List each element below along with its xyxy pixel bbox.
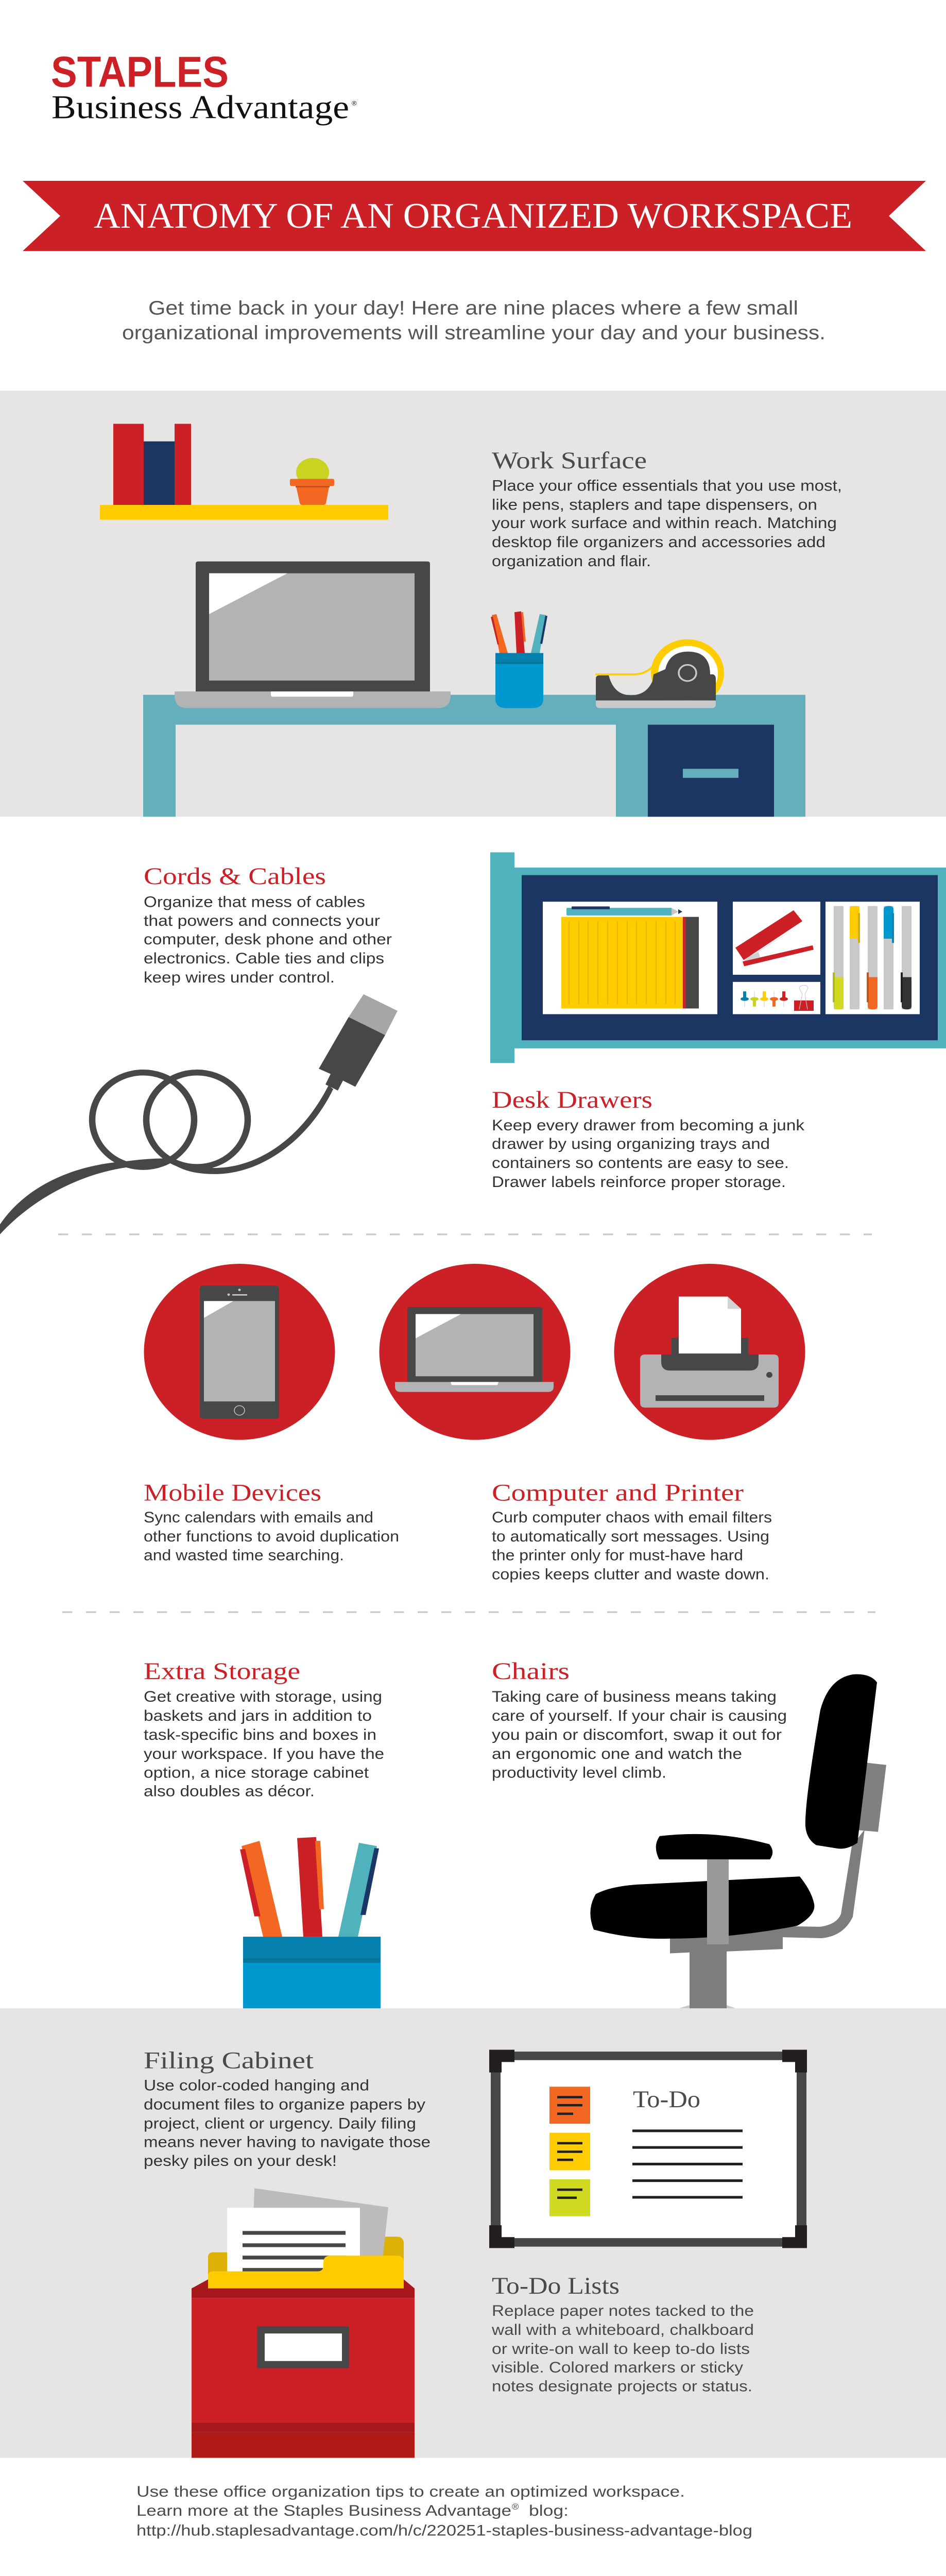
panel: chairs bbox=[492, 1658, 886, 2008]
logo: Staples Business Advantage: ® bbox=[352, 100, 357, 107]
text: filing body: pesky piles on your desk! bbox=[144, 2152, 337, 2170]
text: cords body: electronics. Cable ties and clips bbox=[144, 950, 384, 967]
panel: desk drawers bbox=[490, 852, 946, 1191]
text: storage body: option, a nice storage cabinet bbox=[144, 1764, 369, 1781]
panel: computer and printer bbox=[379, 1264, 805, 1583]
text: mobile body: and wasted time searching. bbox=[144, 1547, 344, 1564]
text: to-do body: notes designate projects or status. bbox=[492, 2378, 752, 2395]
icon: tape dispenser bbox=[595, 639, 724, 708]
footer text: http://hub.staplesadvantage.com/h/c/220251-staples-business-advantage-blog bbox=[136, 2522, 752, 2539]
text: chairs body: an ergonomic one and watch the bbox=[492, 1745, 742, 1762]
heading: Filing Cabinet: Filing Cabinet bbox=[144, 2047, 314, 2074]
text: filing body bbox=[144, 2077, 431, 2170]
text: to-do body: Replace paper notes tacked to the bbox=[492, 2302, 754, 2319]
footer text bbox=[136, 2483, 752, 2539]
text: storage body: your workspace. If you have the bbox=[144, 1745, 384, 1762]
text: work surface body: organization and flair. bbox=[492, 552, 651, 570]
text: work surface body: your work surface and within reach. Matching bbox=[492, 514, 837, 532]
heading: Chairs: Chairs bbox=[492, 1658, 570, 1685]
text: computer body: Curb computer chaos with email filters bbox=[492, 1509, 772, 1526]
panel: mobile devices bbox=[144, 1264, 399, 1564]
icon: books on shelf bbox=[100, 424, 388, 520]
icon: laptop in red circle bbox=[379, 1264, 571, 1440]
icon: phone in red circle bbox=[144, 1264, 335, 1440]
panel: extra storage bbox=[144, 1658, 384, 2008]
text: filing body: Use color-coded hanging and bbox=[144, 2077, 369, 2094]
icon: office chair bbox=[590, 1674, 886, 2008]
text: chairs body: care of yourself. If your chair is causing bbox=[492, 1707, 787, 1724]
text: storage body: also doubles as décor. bbox=[144, 1783, 315, 1800]
heading: Mobile Devices: Mobile Devices bbox=[144, 1480, 321, 1506]
text: work surface body: like pens, staplers and tape dispensers, on bbox=[492, 496, 817, 513]
text: desk drawers body bbox=[492, 1116, 805, 1191]
panel: cords and cables bbox=[0, 863, 398, 1234]
text: desk drawers body: Keep every drawer from becoming a junk bbox=[492, 1116, 805, 1134]
text: mobile body: Sync calendars with emails and bbox=[144, 1509, 373, 1526]
notepad tray bbox=[543, 902, 717, 1014]
text: storage body: task-specific bins and boxes in bbox=[144, 1726, 376, 1743]
icon: whiteboard bbox=[489, 2049, 807, 2248]
text: desk drawers body: containers so contents are easy to see. bbox=[492, 1154, 789, 1172]
text: cords body: Organize that mess of cables bbox=[144, 893, 365, 910]
icon: laptop bbox=[175, 562, 451, 708]
logo: Staples Business Advantage: Business Advantage bbox=[51, 89, 349, 126]
icon: desk bbox=[143, 695, 805, 817]
text: mobile body: other functions to avoid duplication bbox=[144, 1528, 399, 1545]
icon: printer in red circle bbox=[614, 1264, 805, 1440]
footer text: Learn more at the Staples Business Advantage bbox=[136, 2502, 511, 2519]
text: chairs body: you pain or discomfort, swap it out for bbox=[492, 1726, 782, 1743]
panel: work surface bbox=[0, 391, 946, 817]
text: storage body bbox=[144, 1688, 384, 1800]
text: chairs body bbox=[492, 1688, 787, 1781]
title banner bbox=[23, 181, 926, 251]
text: To-Do: To-Do bbox=[633, 2087, 700, 2112]
text: to-do body: wall with a whiteboard, chalkboard bbox=[491, 2321, 754, 2338]
text: filing body: means never having to navigate those bbox=[144, 2133, 431, 2150]
icon: pen cup bbox=[491, 611, 547, 708]
icon: filing cabinet bbox=[192, 2188, 415, 2458]
text: computer body: to automatically sort messages. Using bbox=[492, 1528, 769, 1545]
text: storage body: baskets and jars in addition to bbox=[144, 1707, 372, 1724]
icon: open drawer bbox=[490, 852, 946, 1063]
markers tray bbox=[825, 902, 920, 1014]
footer text: blog: bbox=[529, 2502, 569, 2519]
sticky notes bbox=[549, 2087, 590, 2216]
panel: filing and to-do background bbox=[0, 2008, 946, 2458]
text: to-do body: or write-on wall to keep to-do lists bbox=[492, 2340, 750, 2358]
intro text: organizational improvements will streamline your day and your business. bbox=[122, 322, 825, 344]
text: work surface body: desktop file organizers and accessories add bbox=[492, 533, 825, 551]
heading: Desk Drawers: Desk Drawers bbox=[492, 1087, 652, 1113]
text: computer body: copies keeps clutter and waste down. bbox=[492, 1566, 769, 1583]
title banner: ANATOMY OF AN ORGANIZED WORKSPACE bbox=[94, 196, 852, 235]
text: filing body: document files to organize papers by bbox=[144, 2096, 426, 2113]
intro text: Get time back in your day! Here are nine places where a few small bbox=[148, 297, 798, 319]
logo: Staples Business Advantage: STAPLES bbox=[51, 47, 229, 96]
text: cords body: that powers and connects your bbox=[144, 912, 380, 929]
icon: cable and plug bbox=[0, 994, 398, 1234]
heading: Work Surface: Work Surface bbox=[492, 448, 647, 474]
icon: cactus bbox=[290, 458, 334, 505]
footer text: Use these office organization tips to create an optimized workspace. bbox=[136, 2483, 685, 2500]
text: chairs body: productivity level climb. bbox=[492, 1764, 666, 1781]
text: to-do body: visible. Colored markers or sticky bbox=[492, 2359, 744, 2376]
text: work surface body bbox=[492, 477, 842, 570]
heading: To-Do Lists: To-Do Lists bbox=[492, 2273, 620, 2299]
logo: Staples Business Advantage bbox=[51, 47, 357, 126]
text: cords body bbox=[144, 893, 392, 986]
text: to-do body bbox=[491, 2302, 754, 2395]
intro text bbox=[122, 297, 825, 344]
text: cords body: computer, desk phone and other bbox=[144, 930, 392, 948]
pins tray bbox=[733, 982, 820, 1014]
text: computer body: the printer only for must-have hard bbox=[492, 1547, 743, 1564]
text: cords body: keep wires under control. bbox=[144, 969, 335, 986]
text: desk drawers body: drawer by using organizing trays and bbox=[492, 1135, 770, 1153]
stapler tray bbox=[733, 902, 820, 975]
heading: Computer and Printer: Computer and Printer bbox=[492, 1480, 744, 1506]
icon: large pen cup bbox=[240, 1837, 381, 2008]
footer text: ® bbox=[512, 2502, 519, 2512]
heading: Extra Storage: Extra Storage bbox=[144, 1658, 300, 1685]
text: storage body: Get creative with storage, using bbox=[144, 1688, 382, 1705]
text: chairs body: Taking care of business means taking bbox=[492, 1688, 777, 1705]
text: mobile body bbox=[144, 1509, 399, 1564]
heading: Cords & Cables: Cords & Cables bbox=[144, 863, 326, 890]
text: desk drawers body: Drawer labels reinforce proper storage. bbox=[492, 1173, 786, 1191]
text: work surface body: Place your office essentials that you use most, bbox=[492, 477, 842, 494]
text: computer body bbox=[492, 1509, 772, 1583]
text: filing body: project, client or urgency. Daily filing bbox=[144, 2115, 416, 2132]
